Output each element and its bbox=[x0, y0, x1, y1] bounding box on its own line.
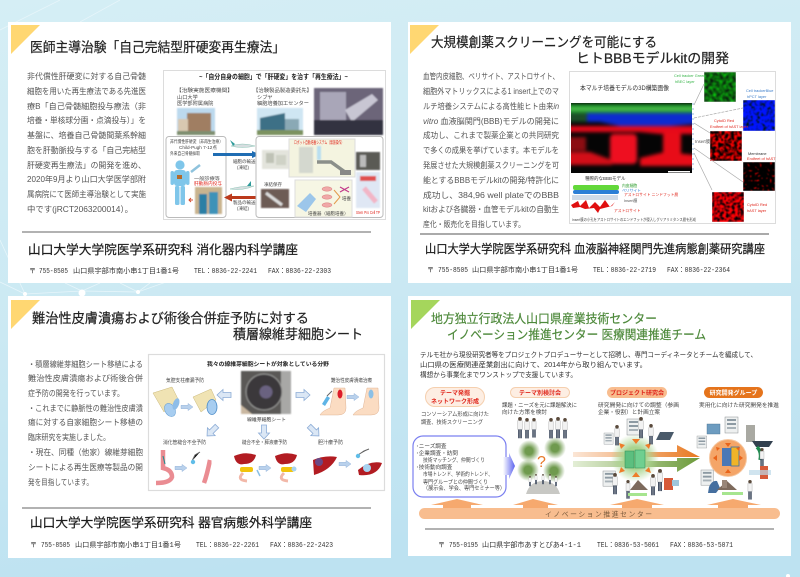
contact line: 〒 bbox=[30, 542, 37, 550]
divider bbox=[425, 528, 774, 530]
divider bbox=[22, 508, 371, 509]
figure: 3D images bbox=[560, 72, 776, 224]
contact line: FAX：0836-22-2423 bbox=[270, 542, 333, 550]
diagram: BBB model schema: 種際的なBBBモデル bbox=[585, 175, 626, 182]
stage 4: R&D group: 研究開発グループ bbox=[710, 389, 757, 397]
figure: treatment flow: 山口大学 bbox=[177, 93, 198, 101]
figure: 3D images: Membrane bbox=[748, 151, 767, 156]
body text: 血管内皮細胞、ペリサイト、アストロサイト、 bbox=[423, 71, 559, 81]
box: patient side: 外来自己骨髄採取 bbox=[170, 150, 200, 157]
cluster: discussion: ? bbox=[537, 454, 546, 471]
figure: treatment flow: 製品の輸送 bbox=[233, 199, 256, 206]
accent triangle bbox=[411, 300, 440, 329]
department name: 山口大学大学院医学系研究科 器官病態外科学講座 bbox=[30, 515, 312, 530]
contact line: TEL：0836-22-2261 bbox=[196, 542, 259, 550]
body text: 発展させた大規模創薬スクリーニングを可 bbox=[423, 160, 559, 170]
figure: 3D images: hPCT layer bbox=[747, 94, 767, 99]
contact line: 〒 bbox=[29, 268, 36, 276]
image: cross-section bbox=[560, 100, 705, 180]
figure: 3D images: Endfeet of hAST bbox=[747, 156, 776, 161]
callout: survey list: 市場トレンド、学術的トレンド、 bbox=[423, 470, 493, 478]
bar: innovation center: イノベーション推進センター bbox=[545, 510, 652, 518]
body text: 胞を肝動脈投与する「自己完結型 bbox=[27, 145, 146, 155]
diagram: BBB model schema: Insert膜の小孔をアストロサイトのエンドフットが侵入しグリアリミタンス層を形成 bbox=[572, 216, 696, 222]
photo: cell sheet dish bbox=[241, 371, 291, 414]
photo: hospital bbox=[177, 108, 215, 135]
icon: robot arm bbox=[317, 162, 345, 172]
figure: 3D images: hBEC layer bbox=[675, 79, 695, 84]
figure: target fields: 我々の線維芽細胞シートが対象としている分野 bbox=[207, 360, 329, 368]
contact line bbox=[29, 266, 331, 276]
box: patient side: 一般診療等 bbox=[194, 175, 220, 182]
figure: target fields: 気腔支柱瘻漏予防 bbox=[166, 376, 204, 384]
figure: target fields: 線維芽細胞シート bbox=[247, 416, 286, 423]
body text: 肝硬変再生療法」の開発を進め、 bbox=[27, 160, 146, 170]
callout: survey list: （展示会、学会、専門セミナー等） bbox=[423, 484, 505, 492]
micrograph: red 1 bbox=[710, 131, 742, 161]
contact line: TEL：0836-22-2719 bbox=[593, 267, 656, 275]
intro text: 山口県の医療関連産業創出に向けて、2014年から取り組んでいます。 bbox=[420, 360, 647, 369]
micrograph: green bbox=[704, 72, 736, 102]
department name: 山口大学大学院医学系研究科 血液脳神経関門先進病態創薬研究講座 bbox=[425, 241, 765, 256]
figure: treatment flow: シブヤ bbox=[257, 93, 273, 101]
contact line: 755-8505 bbox=[41, 542, 70, 550]
box: patient side bbox=[166, 136, 226, 218]
photo: clinic bbox=[195, 187, 222, 214]
heading bbox=[431, 35, 730, 66]
panel: liver cirrhosis trial bbox=[8, 22, 391, 283]
stage 2: theme study bbox=[502, 388, 577, 416]
body text: 成功し、384,96 well plateでのBBB bbox=[423, 190, 560, 200]
body text: kitおよび各臓器・血管モデルkitの自動生 bbox=[423, 204, 559, 214]
stage 3: project study: 企業・役割）と計画立案 bbox=[598, 408, 660, 416]
body text: 瘍に対する自家細胞シート移植の bbox=[28, 417, 143, 427]
contact line: 〒 bbox=[438, 542, 445, 550]
arrow: callout to study bbox=[503, 453, 515, 479]
stage 1: theme discovery: ネットワーク形成 bbox=[431, 398, 479, 406]
panel: innovation center bbox=[408, 296, 791, 556]
figure: treatment flow: 医学部附属病院 bbox=[177, 99, 213, 107]
arrows from sheet to fields bbox=[203, 390, 323, 440]
box: manufacturing side: 凍結保存 bbox=[264, 181, 282, 188]
photo: cell processing center bbox=[257, 108, 303, 135]
contact line: 755-8505 bbox=[438, 267, 468, 275]
contact line bbox=[438, 540, 733, 550]
body text: シートによる再生医療等製品の開 bbox=[28, 462, 143, 472]
contact line: 〒 bbox=[427, 267, 434, 275]
heading bbox=[431, 311, 706, 342]
contact line: 山口県宇部市南小串1丁目1番1号 bbox=[73, 266, 179, 276]
photo: robot lab bbox=[314, 88, 383, 135]
body text: 難治性皮膚潰瘍および術後合併 bbox=[28, 373, 143, 383]
icon: airplanes bbox=[230, 140, 255, 190]
bar: innovation center bbox=[419, 508, 780, 519]
arrows: orange and green flow bbox=[573, 445, 700, 472]
body text: 中です(jRCT2063200014）。 bbox=[27, 204, 133, 214]
stage 3: project study bbox=[598, 387, 679, 416]
arrow: blue to lab bbox=[213, 151, 260, 158]
figure: 3D images: CytoID Red bbox=[714, 118, 734, 123]
body text: 細胞を用いた再生療法である先進医 bbox=[27, 86, 146, 96]
heading: 難治性皮膚潰瘍および術後合併症予防に対する bbox=[32, 311, 309, 326]
cluster: R&D group bbox=[697, 417, 773, 500]
stage 1: theme discovery: 調査、技術スクリーニング bbox=[421, 418, 483, 426]
figure: 3D images: Cell trackerBlue bbox=[746, 88, 773, 93]
contact line: 山口県宇部市南小串1丁目1番1号 bbox=[75, 540, 181, 550]
body text bbox=[27, 71, 146, 214]
micrograph: blue bbox=[743, 100, 775, 131]
body text: 2020年9月より山口大学医学部附 bbox=[27, 174, 146, 184]
body text: 培養・単核球分画・点滴投与）」を bbox=[27, 115, 146, 125]
illustration: trachea bbox=[153, 387, 217, 419]
body text bbox=[28, 359, 143, 487]
body text: ・積層線維芽細胞シート移植による bbox=[28, 359, 143, 369]
body text bbox=[423, 71, 560, 229]
body text: 非代償性肝硬変に対する自己骨髄 bbox=[27, 71, 146, 81]
intro text: テルモ社から現役研究者等をプロジェクトプロデューサーとして招聘し、専門コーディネータとチームを編成して、 bbox=[420, 350, 757, 359]
divider bbox=[22, 232, 371, 233]
box: manufacturing side bbox=[256, 136, 383, 218]
micrograph: dark red bbox=[743, 162, 775, 191]
stage 1: theme discovery: コンソーシアム形成に向けた bbox=[421, 410, 489, 418]
cluster: discussion bbox=[517, 417, 567, 494]
body text: 療B「自己骨髄細胞投与療法（非 bbox=[27, 101, 146, 111]
illustration: esophagus bbox=[156, 450, 210, 483]
body text: 臨床研究を実施しました。 bbox=[28, 432, 110, 442]
figure: target fields bbox=[148, 354, 384, 490]
body text: 基盤に、培養自己骨髄間葉系幹細 bbox=[27, 130, 146, 140]
body text: 症予防の開発を行っています。 bbox=[28, 388, 124, 398]
callout: survey list: 専門グループとの仲間づくり bbox=[423, 478, 488, 486]
stage 1: theme discovery bbox=[421, 388, 489, 426]
figure: treatment flow: 細胞培養加工センター bbox=[257, 99, 309, 107]
heading: 医師主導治験「自己完結型肝硬変再生療法」 bbox=[30, 40, 285, 55]
intro text: 構想から事業化までワンストップで支援しています。 bbox=[420, 370, 577, 379]
body text: ・これまでに静脈性の難治性皮膚潰 bbox=[28, 403, 143, 413]
contact line: 山口県宇部市南小串1丁目1番1号 bbox=[472, 265, 578, 275]
panel: BBB model kit bbox=[408, 22, 791, 283]
diagram: BBB model schema: アストロサイト ニンドフット層 bbox=[624, 192, 678, 197]
callout: survey list bbox=[413, 436, 506, 497]
body text: 発を目指しています。 bbox=[28, 477, 93, 487]
figure: target fields: 消化管縫合不全予防 bbox=[163, 438, 206, 446]
body text: 成功し、これまで製薬企業との共同研究 bbox=[423, 130, 559, 140]
figure: target fields: 難治性皮膚潰瘍治療 bbox=[331, 376, 373, 384]
figure: 3D images: CytoID Red bbox=[747, 202, 767, 207]
arrow: red back to clinic bbox=[224, 194, 260, 202]
heading bbox=[32, 311, 363, 342]
callout: survey list: 技術マッチング、仲間づくり bbox=[423, 456, 485, 464]
contact line: TEL：0836-53-5061 bbox=[597, 542, 659, 550]
contact line: FAX：0836-53-5071 bbox=[670, 542, 733, 550]
stage 1: theme discovery: テーマ発掘 bbox=[440, 389, 470, 397]
contact line bbox=[427, 265, 730, 275]
heading: ヒトBBBモデルkitの開発 bbox=[576, 50, 730, 66]
figure: 3D images: 本マルチ培養モデルの3D構築画像 bbox=[580, 83, 670, 92]
heading: 積層線維芽細胞シート bbox=[233, 327, 363, 342]
diagram: BBB model schema: アストロサイト bbox=[614, 208, 641, 213]
contact line: 755-0195 bbox=[449, 542, 478, 550]
heading: イノベーション推進センター 医療関連推進チーム bbox=[447, 327, 706, 342]
figure: treatment flow: ~「自分自身の細胞」で「肝硬変」を治す「再生療法」~ bbox=[199, 72, 348, 81]
arrows: support from center bbox=[431, 499, 761, 508]
body text: 能とするBBBモデルkitの開発/特許化に bbox=[423, 175, 559, 185]
callout: survey list: ･技術動向調査 bbox=[416, 463, 453, 471]
illustration: pancreas bbox=[234, 453, 297, 481]
box: manufacturing side: 培養 bbox=[342, 195, 351, 202]
body text: 産化・販売化を目指しています。 bbox=[423, 219, 525, 229]
box: manufacturing side: Stem Pro Cell TP bbox=[356, 210, 380, 215]
body text: で多くの成果を挙げています。本モデルを bbox=[423, 145, 559, 155]
contact line bbox=[30, 540, 333, 550]
icon: syringe bbox=[191, 165, 200, 172]
micrograph: red 2 bbox=[712, 192, 744, 222]
illustration: liver bbox=[313, 449, 382, 475]
body text: ・現在、同種（他家）線維芽細胞 bbox=[28, 447, 143, 457]
box: patient side: 肝動脈内投与 bbox=[194, 180, 222, 187]
stage 3: project study: 研究開発に向けての調整（参画 bbox=[598, 401, 679, 409]
diagram: BBB model schema: Insert膜 bbox=[624, 198, 637, 203]
body text: ルチ培養システムによる高性能ヒト由来in bbox=[423, 101, 559, 111]
contact line: 755-8505 bbox=[39, 268, 68, 276]
icon: patient bbox=[170, 160, 190, 205]
stage 2: theme study: 向けた方策を検討 bbox=[502, 408, 547, 416]
stage 4: R&D group bbox=[699, 387, 779, 409]
cluster: project study bbox=[603, 417, 679, 499]
box: manufacturing side: 培養器（細胞培養） bbox=[308, 210, 348, 217]
intro text bbox=[420, 350, 757, 379]
body text: vitro 血液脳関門(BBB)モデルの開発に bbox=[423, 116, 559, 126]
diagram: BBB model schema bbox=[571, 175, 696, 222]
figure: 3D images: hAST layer bbox=[747, 208, 767, 213]
stage 3: project study: プロジェクト研究会 bbox=[610, 389, 664, 397]
figure: target fields: 縫合不全・膵液瘻予防 bbox=[242, 438, 287, 446]
box: patient side: Child-Pugh 7-12点 bbox=[179, 145, 217, 151]
contact line: 山口県宇部市あすとぴあ4-1-1 bbox=[482, 540, 581, 550]
callout: survey list: ･企業調査・訪問 bbox=[416, 449, 458, 457]
department name: 山口大学大学院医学系研究科 消化器内科学講座 bbox=[28, 242, 298, 257]
accent triangle bbox=[410, 25, 439, 54]
stage 4: R&D group: 実用化に向けた研究開発を推進 bbox=[699, 401, 779, 409]
contact line: TEL：0836-22-2241 bbox=[194, 268, 257, 276]
box: patient side: 非代償性肝硬変（非再生治療） bbox=[170, 138, 223, 145]
figure: 3D images: Insert膜 bbox=[695, 138, 711, 145]
diagram: BBB model schema: ペリサイト bbox=[622, 188, 641, 193]
figure: target fields: 胆汁瘻予防 bbox=[318, 438, 343, 446]
figure: treatment flow bbox=[164, 70, 386, 220]
heading: 大規模創薬スクリーニングを可能にする bbox=[431, 35, 657, 50]
figure: treatment flow: (凍結) bbox=[237, 164, 249, 171]
callout: survey list: ･ニーズ調査 bbox=[416, 442, 447, 450]
figure: treatment flow: 細胞の輸送 bbox=[233, 158, 256, 165]
heading: 地方独立行政法人山口県産業技術センター bbox=[431, 311, 657, 326]
divider bbox=[420, 233, 769, 235]
figure: treatment flow: (凍結) bbox=[237, 205, 249, 212]
body text: 属病院にて医師主導治験として実施 bbox=[27, 189, 146, 199]
diagram: BBB model schema: 内皮細胞 bbox=[622, 183, 637, 188]
box: manufacturing side: ロボット自動培養システム（無菌操作） bbox=[294, 139, 344, 146]
figure: 3D images: Cell tracker Green bbox=[674, 73, 706, 78]
figure: 3D images: Endfeet of hAST layer bbox=[710, 124, 749, 129]
illustration: foot ulcer bbox=[320, 388, 379, 415]
accent triangle bbox=[11, 25, 40, 54]
panel: fibroblast sheet bbox=[8, 296, 391, 558]
contact line: FAX：0836-22-2364 bbox=[667, 267, 730, 275]
figure: treatment flow: 【治験実施医療機関】 bbox=[176, 86, 233, 94]
contact line: FAX：0836-22-2303 bbox=[268, 268, 331, 276]
stage 2: theme study: テーマ別検討会 bbox=[519, 389, 561, 397]
accent triangle bbox=[11, 300, 40, 329]
body text: 細胞外マトリックスによる1 insert上でのマ bbox=[423, 86, 559, 96]
stage 2: theme study: 課題・ニーズを元に課題解決に bbox=[502, 401, 577, 409]
figure: treatment flow: 【治験製品製造委託先】 bbox=[253, 86, 312, 94]
